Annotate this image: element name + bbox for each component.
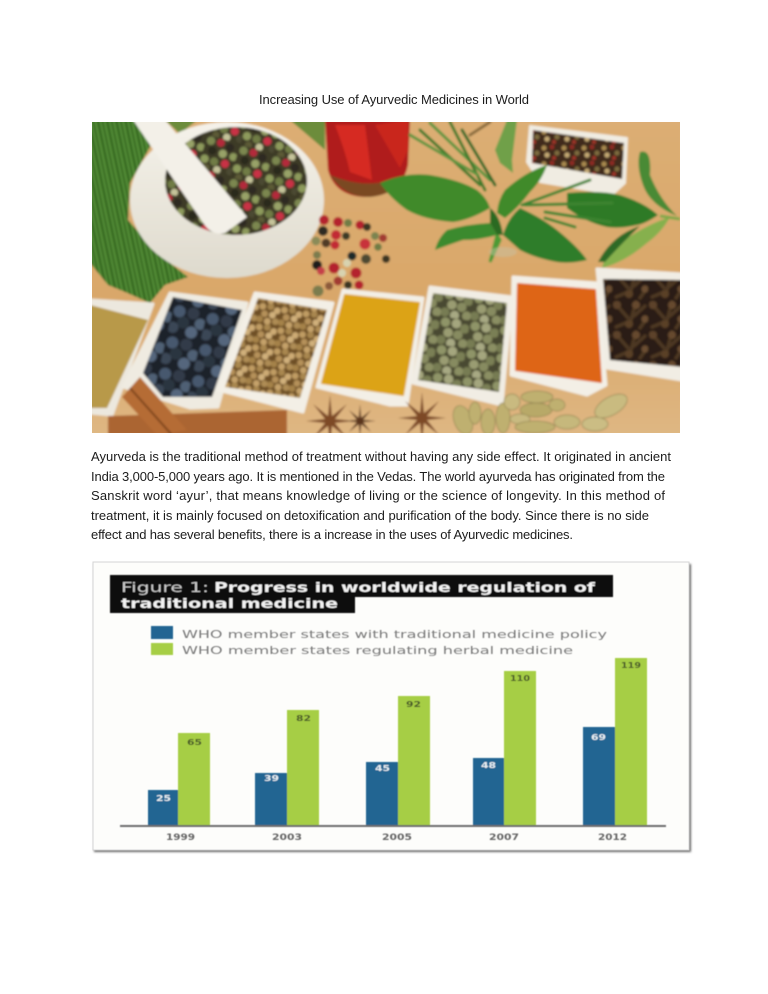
photo: clove bowl	[597, 269, 682, 380]
bars: 2005	[366, 696, 430, 826]
paragraph: Sanskrit word ‘ayur’, that means knowledge of living or the science of longevity. In this method of	[91, 488, 665, 503]
chart heading	[110, 575, 613, 613]
photo: green backdrop behind mortar	[165, 120, 325, 150]
photo: coriander seed bowl	[218, 293, 333, 412]
paragraph	[91, 449, 671, 542]
bars: 2005: 92	[406, 700, 421, 709]
year labels: 2007	[489, 833, 519, 843]
photo: cinnamon sticks	[108, 377, 287, 435]
photo: top right bowl with spice flakes	[527, 126, 627, 194]
chart panel: progress in worldwide regulation of traditional medicine	[93, 562, 691, 852]
photo: pestle	[133, 120, 247, 234]
bars: 2003: 39	[264, 774, 280, 783]
photo: right hand sage sprig	[598, 151, 680, 268]
chart heading: Progress in worldwide regulation of	[214, 580, 595, 596]
paragraph: effect and has several benefits, there is a increase in the uses of Ayurvedic medicines.	[91, 527, 573, 542]
photo: red pepper jar	[325, 120, 410, 197]
year labels: 2003	[272, 833, 302, 843]
photo: khaki powder bowl	[90, 300, 153, 415]
photo: fennel fronds	[90, 120, 188, 303]
legend: WHO member states regulating herbal medicine	[182, 644, 573, 657]
year labels: 2012	[598, 833, 627, 843]
photo: juniper berry bowl	[123, 293, 247, 408]
photo: rosemary stems	[410, 122, 495, 190]
panel background	[93, 562, 689, 850]
bars: 2005: 45	[375, 764, 391, 773]
baseline axis	[120, 825, 666, 827]
bar chart	[120, 658, 666, 843]
year labels: 2005	[382, 833, 412, 843]
bars: 1999: 25	[156, 794, 172, 803]
photo: turmeric bowl	[317, 290, 423, 405]
bars: 2012: 119	[621, 661, 642, 670]
bars: 2012	[583, 658, 647, 826]
panel drop shadow	[94, 564, 691, 852]
bars: 2003	[255, 710, 319, 826]
bars: 1999: 65	[187, 738, 203, 747]
photo: scattered peppercorns	[312, 215, 390, 296]
chart heading: traditional medicine	[121, 596, 338, 612]
photo: ayurvedic herbs and spices	[90, 120, 682, 445]
bars: 2007: 48	[481, 761, 497, 770]
chart heading: Figure 1:	[121, 580, 209, 596]
bars: 2012: 69	[591, 733, 607, 742]
year labels: 1999	[166, 833, 195, 843]
year labels	[166, 833, 627, 843]
photo: star anise	[308, 394, 445, 433]
photo: green peppercorn bowl	[413, 287, 512, 405]
photo: orange chilli powder bowl	[511, 277, 606, 395]
bars: 2003: 82	[296, 714, 311, 723]
photo: cardamom pods	[452, 390, 628, 433]
paragraph: treatment, it is mainly focused on detoxification and purification of the body. Since there is no side	[91, 508, 649, 523]
bars: 1999	[148, 733, 210, 826]
title: Increasing Use of Ayurvedic Medicines in World	[259, 92, 529, 107]
legend: WHO member states with traditional medicine policy	[182, 628, 608, 641]
bars: 2007	[473, 671, 536, 826]
legend	[151, 626, 608, 657]
photo: sage leaves	[380, 120, 658, 263]
bars: 2007: 110	[510, 674, 531, 683]
paragraph: Ayurveda is the traditional method of treatment without having any side effect. It originated in ancient	[91, 449, 671, 464]
photo: peppercorns in mortar	[165, 127, 307, 235]
paragraph: India 3,000-5,000 years ago. It is mentioned in the Vedas. The world ayurveda has originated from the	[91, 469, 665, 484]
photo: white mortar bowl	[130, 122, 324, 278]
photo: wooden table	[90, 120, 682, 435]
